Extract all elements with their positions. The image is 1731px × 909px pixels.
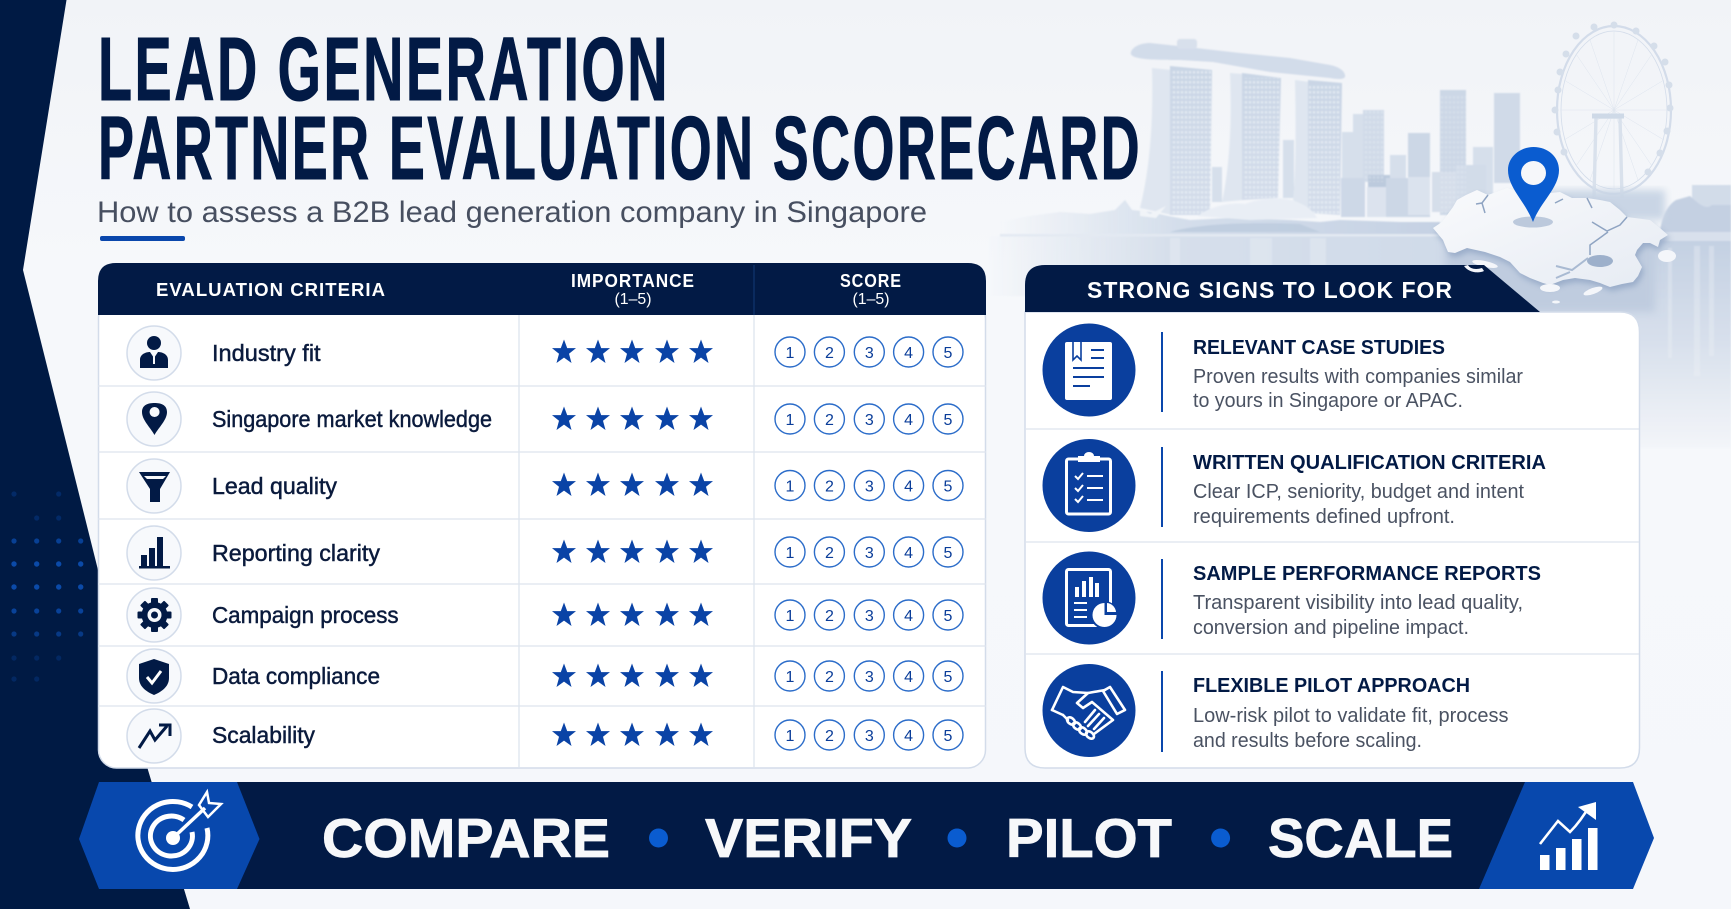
sign: sample performance reports: [1042, 552, 1541, 644]
banner separators: [649, 828, 1230, 848]
score numbers: 3: [865, 728, 874, 745]
score numbers: 1: [786, 728, 795, 745]
sign: relevant case studies: RELEVANT CASE STUDIES: [1193, 337, 1445, 359]
table header: [156, 271, 902, 308]
panel: strong signs to look for: [1025, 265, 1640, 768]
table header: IMPORTANCE: [571, 271, 695, 291]
icon: bars: [139, 537, 170, 568]
score numbers: 4: [904, 478, 913, 496]
Singapore map with location pin: [1433, 147, 1676, 312]
score numbers: 2: [825, 345, 834, 362]
panel header: [1025, 265, 1540, 312]
accent underline: [100, 236, 185, 241]
icon: map pin: [142, 403, 167, 435]
sign: sample performance reports: conversion and pipeline impact.: [1193, 617, 1469, 639]
score numbers: 3: [865, 478, 874, 496]
score numbers: 2: [825, 669, 834, 686]
icon: funnel: [139, 472, 170, 502]
row labels: Singapore market knowledge: [212, 406, 492, 432]
banner words: SCALE: [1268, 807, 1453, 869]
table header: (1–5): [614, 291, 652, 308]
row labels: Campaign process: [212, 602, 399, 628]
sign: written qualification criteria: requirements defined upfront.: [1193, 506, 1455, 528]
banner words: [322, 807, 1453, 869]
score numbers: 5: [944, 345, 953, 362]
score numbers: 3: [865, 412, 874, 429]
sign: relevant case studies: Proven results with companies similar: [1193, 366, 1523, 388]
score numbers: 1: [786, 345, 795, 362]
icon: target with arrow: [138, 792, 221, 869]
score numbers: 4: [904, 545, 913, 562]
icon: growth bars: [1540, 802, 1598, 870]
score numbers: 3: [865, 669, 874, 686]
score numbers: 4: [904, 345, 913, 362]
skyline background illustration: [985, 22, 1731, 448]
score numbers: 2: [825, 478, 834, 496]
sign: flexible pilot approach: [1042, 664, 1508, 757]
score numbers: 4: [904, 412, 913, 429]
score numbers: 2: [825, 412, 834, 429]
score numbers: [786, 345, 953, 745]
banner words: VERIFY: [705, 807, 912, 869]
sign: sample performance reports: Transparent visibility into lead quality,: [1193, 592, 1523, 614]
score numbers: 2: [825, 545, 834, 562]
banner words: COMPARE: [322, 807, 610, 869]
row labels: Reporting clarity: [212, 540, 380, 566]
icon: growth arrow: [139, 725, 170, 748]
left navy angled band with dot pattern: [0, 0, 190, 909]
sign: sample performance reports: SAMPLE PERFORMANCE REPORTS: [1193, 563, 1541, 585]
title: LEAD GENERATION: [98, 20, 670, 120]
icon: document: [1065, 342, 1112, 400]
score numbers: 4: [904, 669, 913, 686]
table header: EVALUATION CRITERIA: [156, 280, 386, 300]
panel: evaluation criteria table: [98, 263, 986, 768]
water: [985, 236, 1505, 296]
score numbers: 5: [944, 478, 953, 496]
icon: shield check: [139, 659, 169, 695]
far shore right: [1692, 185, 1731, 215]
score numbers: 3: [865, 345, 874, 362]
score numbers: 5: [944, 608, 953, 625]
table header: (1–5): [852, 291, 890, 308]
sign: flexible pilot approach: and results before scaling.: [1193, 730, 1422, 752]
row labels: [212, 340, 492, 748]
Marina Bay Sands towers: [1140, 68, 1172, 215]
waterfront trees and domes: [1000, 200, 1440, 234]
icon: handshake: [1052, 687, 1125, 740]
sign: written qualification criteria: WRITTEN QUALIFICATION CRITERIA: [1193, 452, 1546, 474]
row labels: Scalability: [212, 722, 315, 748]
title: [98, 20, 1142, 199]
score numbers: 5: [944, 545, 953, 562]
table header: SCORE: [840, 271, 902, 291]
subtitle: How to assess a B2B lead generation company in Singapore: [97, 196, 927, 229]
importance stars: [552, 340, 713, 746]
score numbers: 1: [786, 478, 795, 496]
score numbers: 1: [786, 608, 795, 625]
score numbers: 1: [786, 545, 795, 562]
sign: relevant case studies: to yours in Singapore or APAC.: [1193, 390, 1463, 412]
score numbers: 5: [944, 728, 953, 745]
score numbers: 5: [944, 669, 953, 686]
score numbers: 1: [786, 412, 795, 429]
score numbers: 4: [904, 608, 913, 625]
sign: written qualification criteria: Clear ICP, seniority, budget and intent: [1193, 481, 1524, 503]
panel header: STRONG SIGNS TO LOOK FOR: [1087, 277, 1453, 303]
row icon discs: [127, 326, 181, 763]
score numbers: 3: [865, 608, 874, 625]
banner words: PILOT: [1006, 807, 1172, 869]
sign: relevant case studies: [1042, 324, 1523, 416]
lower blocks: [1341, 178, 1365, 217]
sign: flexible pilot approach: Low-risk pilot to validate fit, process: [1193, 705, 1508, 727]
score numbers: 3: [865, 545, 874, 562]
sign: written qualification criteria: [1042, 439, 1546, 532]
icon: person: [140, 336, 168, 368]
icon: clipboard: [1066, 452, 1110, 514]
row labels: Data compliance: [212, 663, 380, 689]
bottom banner: [79, 782, 1654, 889]
row labels: Lead quality: [212, 473, 337, 499]
score numbers: 4: [904, 728, 913, 745]
icon: gear: [138, 598, 172, 632]
icon: report with pie chart: [1066, 570, 1118, 629]
sign: flexible pilot approach: FLEXIBLE PILOT APPROACH: [1193, 675, 1470, 697]
score numbers: 2: [825, 728, 834, 745]
Sands skypark deck: [1131, 43, 1345, 79]
distant towers: [1212, 114, 1493, 215]
score numbers: 2: [825, 608, 834, 625]
row labels: Industry fit: [212, 340, 321, 366]
score numbers: 5: [944, 412, 953, 429]
score numbers: 1: [786, 669, 795, 686]
Singapore Flyer wheel: [1552, 22, 1674, 198]
icon: location pin: [1508, 147, 1559, 228]
score circles: [775, 337, 963, 750]
